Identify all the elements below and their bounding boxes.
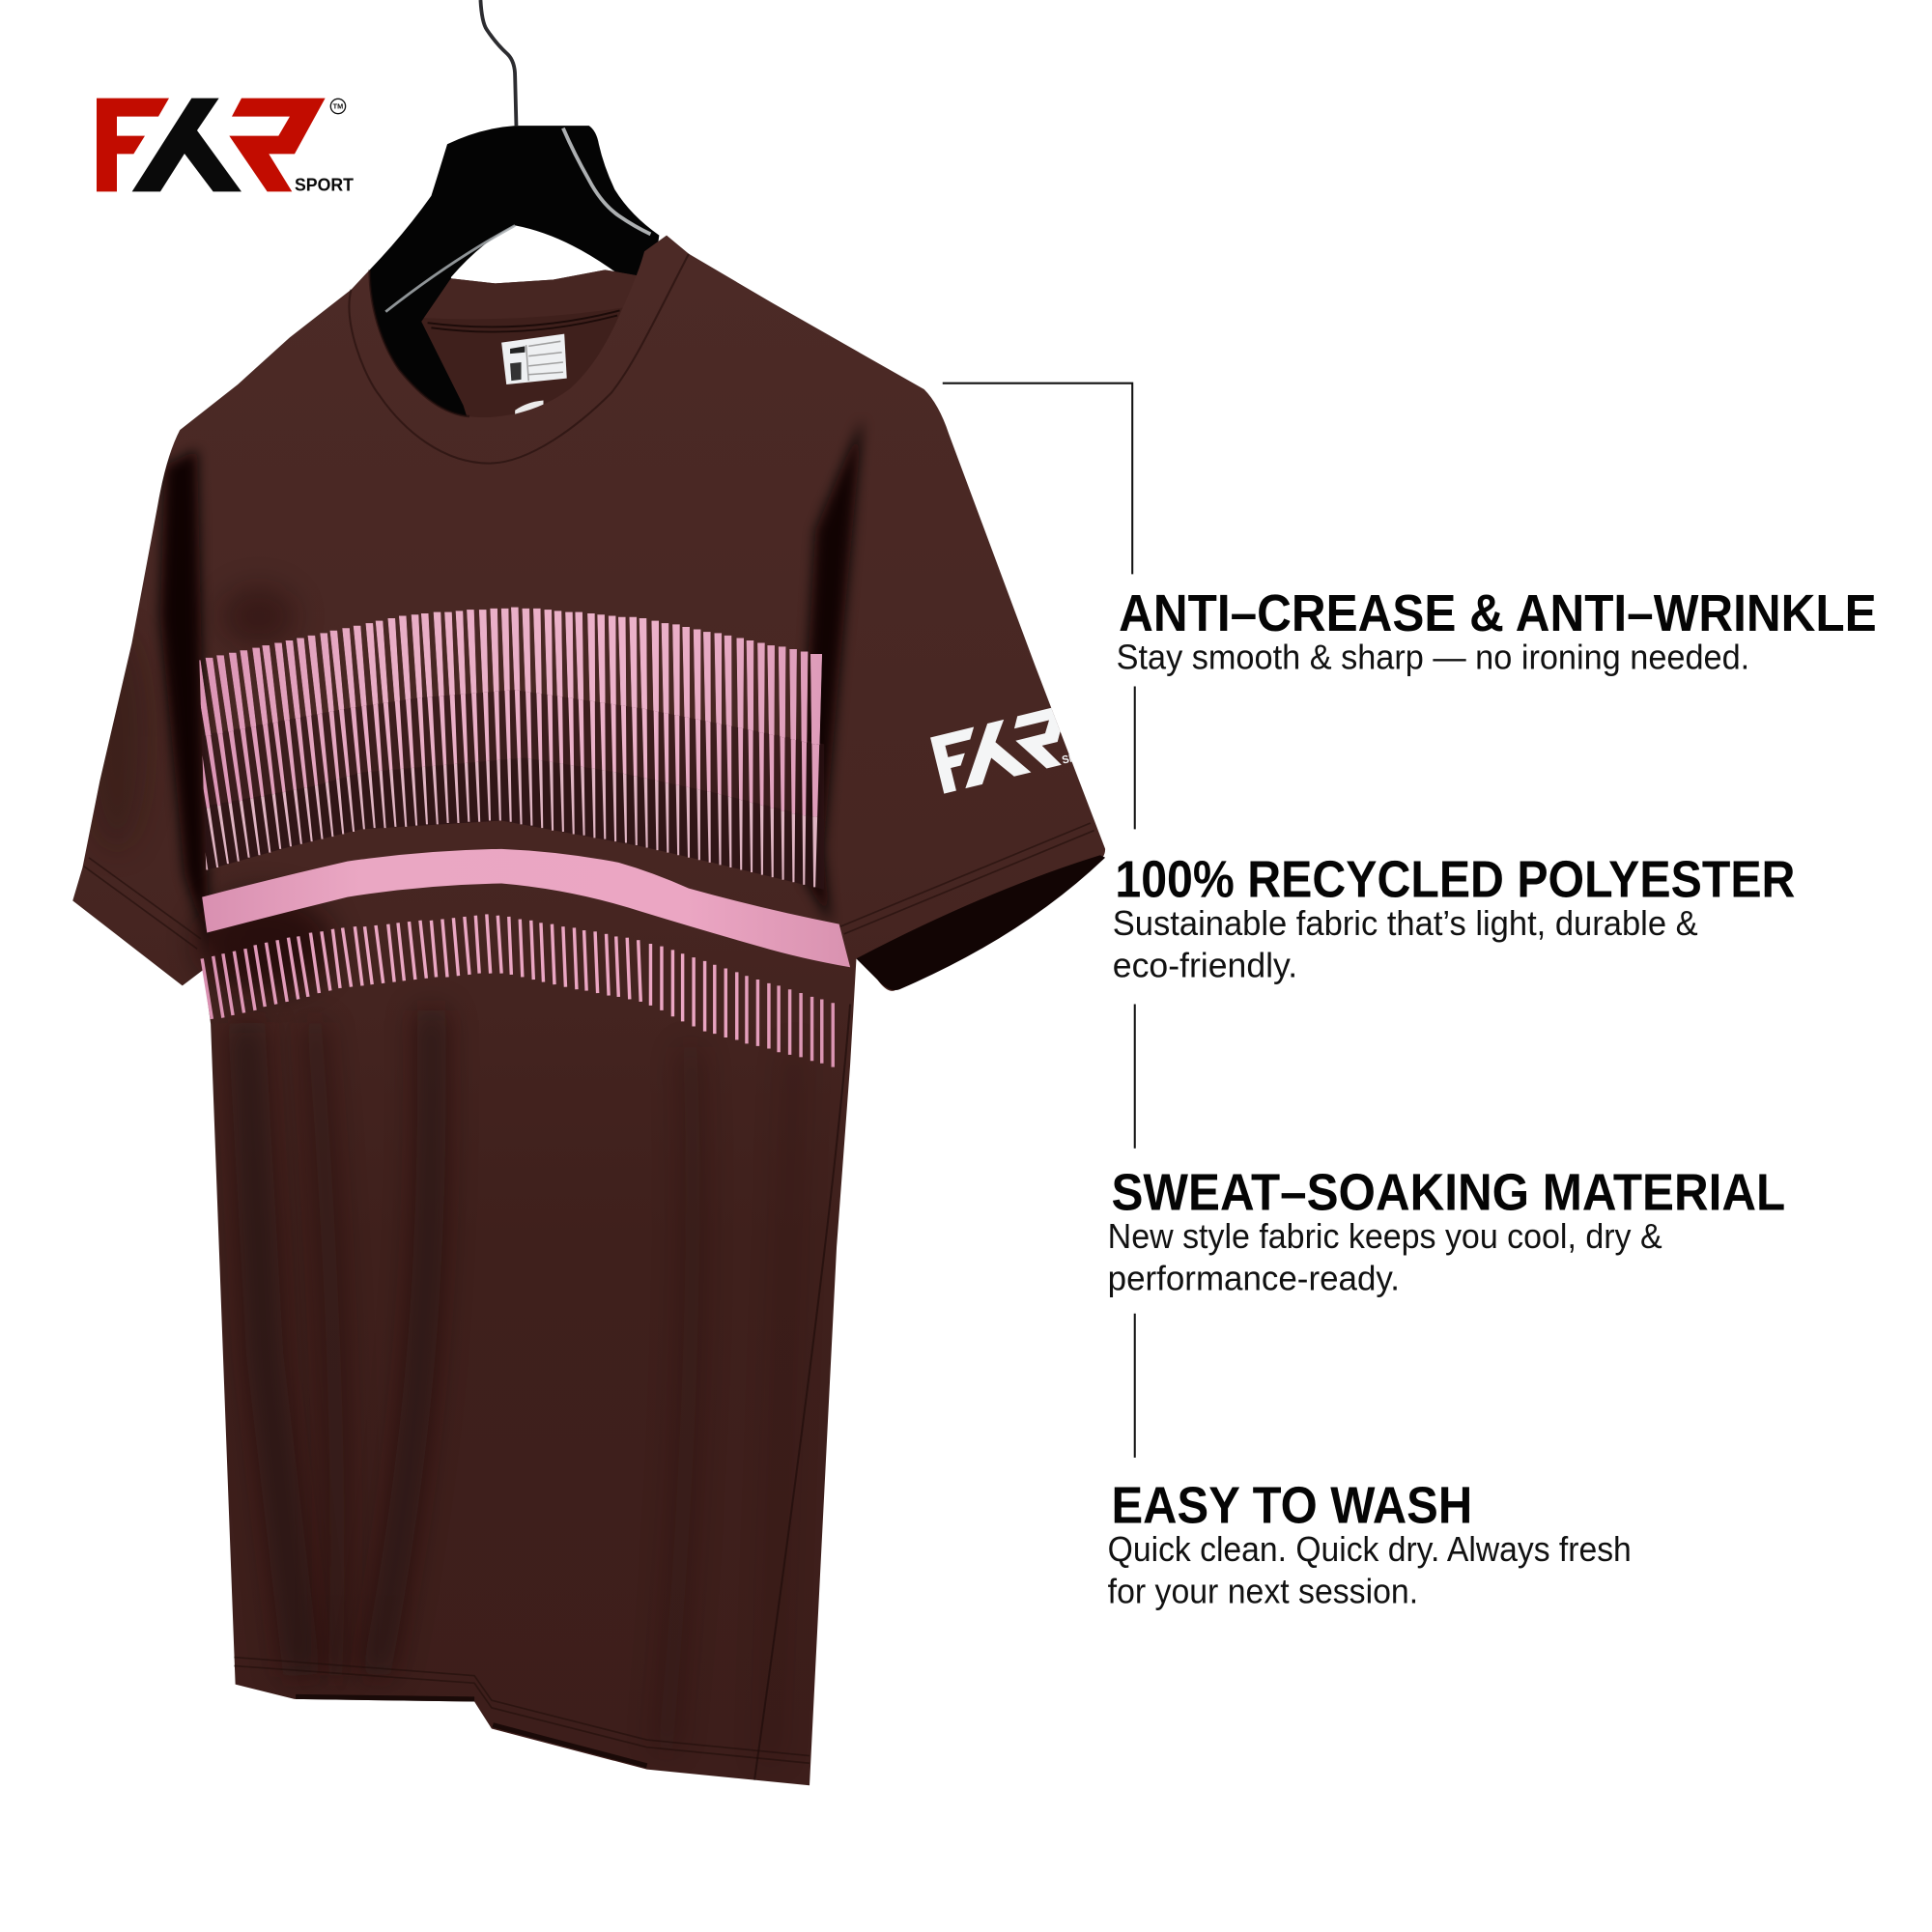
fabric shading	[86, 419, 863, 1783]
t-shirt	[72, 236, 1105, 1785]
feature: recycled polyester: Sustainable fabric that’s light, durable &	[1113, 904, 1698, 943]
inside back neck	[421, 270, 647, 425]
feature: anti-crease	[1117, 585, 1877, 677]
shirt body and sleeves	[72, 236, 1105, 1785]
feature: easy to wash	[1108, 1478, 1632, 1610]
feature: sweat-soaking: New style fabric keeps you cool, dry &	[1108, 1217, 1662, 1256]
feature: anti-crease: Stay smooth & sharp — no ironing needed.	[1117, 639, 1749, 677]
tier shading behind stripes	[200, 690, 824, 890]
feature: recycled polyester: 100% RECYCLED POLYESTER	[1115, 852, 1795, 909]
upper stripe print	[170, 608, 824, 890]
logo: FKR Sport	[97, 99, 355, 194]
feature: recycled polyester	[1113, 852, 1795, 984]
stripes: widest tier	[199, 607, 822, 745]
logo: FKR Sport: SPORT	[295, 174, 355, 194]
solid pink band	[202, 849, 850, 967]
shoulder and hem stitching	[84, 823, 1094, 1763]
sleeve underside shadow	[856, 855, 1105, 990]
feature: easy to wash: for your next session.	[1108, 1572, 1418, 1610]
hem fold shadow	[296, 1696, 647, 1766]
collar stitching	[350, 254, 689, 464]
logo: FKR Sport: TM	[333, 102, 343, 111]
stripes: thin tier	[205, 757, 817, 887]
neck label	[501, 334, 567, 420]
sleeve logo: SPORT	[1061, 747, 1099, 767]
sleeve logo	[930, 707, 1072, 794]
feature: anti-crease: ANTI–CREASE & ANTI–WRINKLE	[1119, 585, 1877, 642]
feature: sweat-soaking: SWEAT–SOAKING MATERIAL	[1112, 1165, 1785, 1222]
hanger	[363, 0, 659, 425]
feature: easy to wash: Quick clean. Quick dry. Always fresh	[1108, 1530, 1632, 1569]
stripes: middle tier	[202, 690, 819, 817]
feature: recycled polyester: eco-friendly.	[1113, 946, 1297, 984]
feature: sweat-soaking: performance-ready.	[1108, 1259, 1400, 1297]
callout connector lines	[943, 384, 1135, 1458]
lower stripe print	[202, 914, 833, 1067]
feature: easy to wash: EASY TO WASH	[1112, 1478, 1472, 1535]
feature: sweat-soaking	[1108, 1165, 1785, 1297]
